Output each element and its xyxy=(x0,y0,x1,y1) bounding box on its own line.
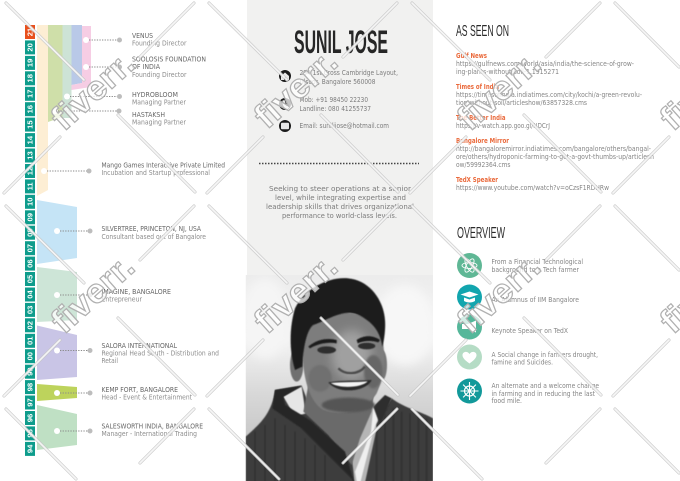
watermark text: fiverr. xyxy=(247,247,345,341)
overview text: in farming and in reducing the last xyxy=(492,390,595,398)
timeline of years: 03 xyxy=(26,306,35,314)
press links: Times of India xyxy=(456,83,499,91)
contact details: Mob: +91 98450 22230 xyxy=(300,96,368,104)
icon: ship wheel xyxy=(457,378,482,404)
career labels xyxy=(102,32,225,438)
press links: Gulf News xyxy=(456,52,487,60)
overview text xyxy=(492,258,599,405)
press links: https://gulfnews.com/world/asia/india/the-science-of-grow- xyxy=(456,60,635,68)
press links: ore/others/hydroponic-farming-to-get-a-govt-thumbs-up/articlesh xyxy=(456,153,654,161)
contact details: 294 1st Cross Cambridge Layout, xyxy=(300,69,398,77)
ears xyxy=(290,348,303,382)
summary text xyxy=(266,184,414,220)
neck xyxy=(303,385,375,465)
watermark text xyxy=(44,42,680,341)
career labels: Incubation and Startup professional xyxy=(102,169,210,177)
timeline of years: 04 xyxy=(26,290,35,299)
overview text: An Alumnus of IIM Bangalore xyxy=(492,296,579,304)
heading: as seen on: AS SEEN ON xyxy=(456,23,509,40)
timeline of years: 14 xyxy=(26,135,35,144)
press links: https://v-watch.app.goo.gl/NDCrJ xyxy=(456,122,550,130)
dotted separator xyxy=(259,162,419,164)
career labels: Founding Director xyxy=(132,40,187,48)
press links: https://timesofindia.indiatimes.com/city/kochi/a-green-revolu- xyxy=(456,91,643,99)
icon: megaphone xyxy=(457,314,482,340)
career labels: SOOLOSIS FOUNDATION xyxy=(132,56,206,64)
timeline of years: 08 xyxy=(26,228,35,237)
career labels: KEMP FORT, BANGALORE xyxy=(102,386,178,394)
overview text: An alternate and a welcome change xyxy=(492,382,599,390)
timeline of years: 05 xyxy=(26,274,35,283)
contact details: Landline: 080 41255737 xyxy=(300,105,371,113)
career labels: HASTAKSH xyxy=(132,111,165,119)
career labels: SALESWORTH INDIA, BANGALORE xyxy=(102,422,203,430)
summary text: performance to world-class levels. xyxy=(282,211,397,220)
career labels: HYDROBLOOM xyxy=(132,91,178,99)
career labels: IMAGINE, BANGALORE xyxy=(102,288,171,296)
overview text: famine and Suicides. xyxy=(492,358,553,366)
career labels: Head - Event & Entertainment xyxy=(102,394,192,402)
timeline of years: 12 xyxy=(26,167,35,175)
press links: TedX Speaker xyxy=(456,176,499,184)
career labels: Retail xyxy=(102,357,118,365)
press links: https://www.youtube.com/watch?v=oCzsF1RDHRw xyxy=(456,184,610,192)
sweater xyxy=(246,386,433,481)
career labels: Manager - International Trading xyxy=(102,430,197,438)
overview text: A Social change in farmers drought, xyxy=(492,351,598,359)
face xyxy=(303,313,384,413)
timeline of years: 95 xyxy=(26,428,35,438)
career labels: Managing Partner xyxy=(132,98,186,106)
timeline of years: 10 xyxy=(26,198,35,206)
watermark text: fiverr. xyxy=(247,42,345,136)
timeline of years: 16 xyxy=(26,105,35,113)
text: SUNIL JOSE xyxy=(294,24,388,60)
eyebrows xyxy=(308,339,337,348)
career bars xyxy=(37,25,91,450)
timeline of years: 19 xyxy=(26,59,35,67)
watermark text: fiverr. xyxy=(450,44,548,138)
timeline of years: 01 xyxy=(26,336,35,345)
hair xyxy=(291,278,385,370)
summary text: leadership skills that drives organizational xyxy=(266,202,414,211)
timeline of years: 97 xyxy=(26,398,35,407)
career labels: Founding Director xyxy=(132,71,187,79)
press links: tion-without-soil/articleshow/63857328.cms xyxy=(456,99,588,107)
press links: Bangalore Mirror xyxy=(456,137,510,145)
icon: atom xyxy=(457,253,482,278)
timeline of years xyxy=(25,25,35,456)
contact details: Email: sunilijose@hotmail.com xyxy=(300,122,389,130)
summary text: level, while integrating expertise and xyxy=(275,193,406,202)
eyes xyxy=(317,346,336,354)
press links: ow/59992364.cms xyxy=(456,161,511,169)
press links: ing-plants-without-soil-1.1915271 xyxy=(456,68,559,76)
career labels: SALORA INTERNATIONAL xyxy=(102,342,177,350)
overview text: Keynote Speaker on TedX xyxy=(492,327,568,335)
career labels: VENUS xyxy=(132,32,153,40)
timeline of years: 20 xyxy=(26,43,35,52)
timeline of years: 00 xyxy=(26,352,35,360)
press links: The Better India xyxy=(456,114,506,122)
watermark text: fiverr. xyxy=(450,247,548,341)
career labels: Managing Partner xyxy=(132,118,186,126)
icon: phone xyxy=(279,98,291,110)
photo: portrait xyxy=(242,275,435,481)
icon: graduation cap xyxy=(457,284,482,310)
timeline of years: 02 xyxy=(26,321,35,330)
heading: overview: OVERVIEW xyxy=(457,225,505,242)
summary text: Seeking to steer operations at a senior xyxy=(269,184,412,193)
timeline of years: 09 xyxy=(26,213,35,222)
career labels: Entrepreneur xyxy=(102,296,142,304)
timeline of years: 98 xyxy=(26,383,35,391)
press links: http://bangaloremirror.indiatimes.com/bangalore/others/bangal- xyxy=(456,145,652,153)
leader lines and dots xyxy=(41,37,122,434)
overview text: background to a Tech farmer xyxy=(492,266,579,274)
icon: heart xyxy=(457,344,482,370)
press links xyxy=(456,52,654,192)
mouth xyxy=(328,380,372,390)
timeline of years: 15 xyxy=(26,120,35,129)
contact details xyxy=(300,69,398,130)
timeline of years: 21 xyxy=(26,27,35,36)
collar xyxy=(373,395,392,425)
career labels: Regional Head South - Distribution and xyxy=(102,350,219,358)
timeline of years: 18 xyxy=(26,74,35,83)
watermark text: fiverr. xyxy=(44,247,142,341)
career labels: SILVERTREE, PRINCETON, NJ, USA xyxy=(102,225,201,233)
icon: home xyxy=(279,70,291,82)
shirt xyxy=(283,387,306,417)
watermark text: fiverr. xyxy=(44,44,142,138)
contact details: Ulsoor, Bangalore 560008 xyxy=(300,78,376,86)
career labels: Consultant based out of Bangalore xyxy=(102,233,206,241)
timeline of years: 07 xyxy=(26,244,35,252)
panel: profile xyxy=(247,0,433,276)
timeline of years: 06 xyxy=(26,259,35,268)
timeline of years: 13 xyxy=(26,151,35,160)
overview text: food mile. xyxy=(492,397,522,405)
timeline of years: 94 xyxy=(26,444,35,453)
icon: email xyxy=(279,120,291,132)
timeline of years: 99 xyxy=(26,367,35,376)
timeline of years: 96 xyxy=(26,414,35,422)
timeline of years: 17 xyxy=(26,90,35,98)
career labels: Mango Games Interactive Private Limited xyxy=(102,162,225,170)
nose xyxy=(338,367,365,373)
timeline of years: 11 xyxy=(26,182,35,190)
overview text: From a Financial Technological xyxy=(492,258,583,266)
career labels: OF INDIA xyxy=(132,63,160,71)
